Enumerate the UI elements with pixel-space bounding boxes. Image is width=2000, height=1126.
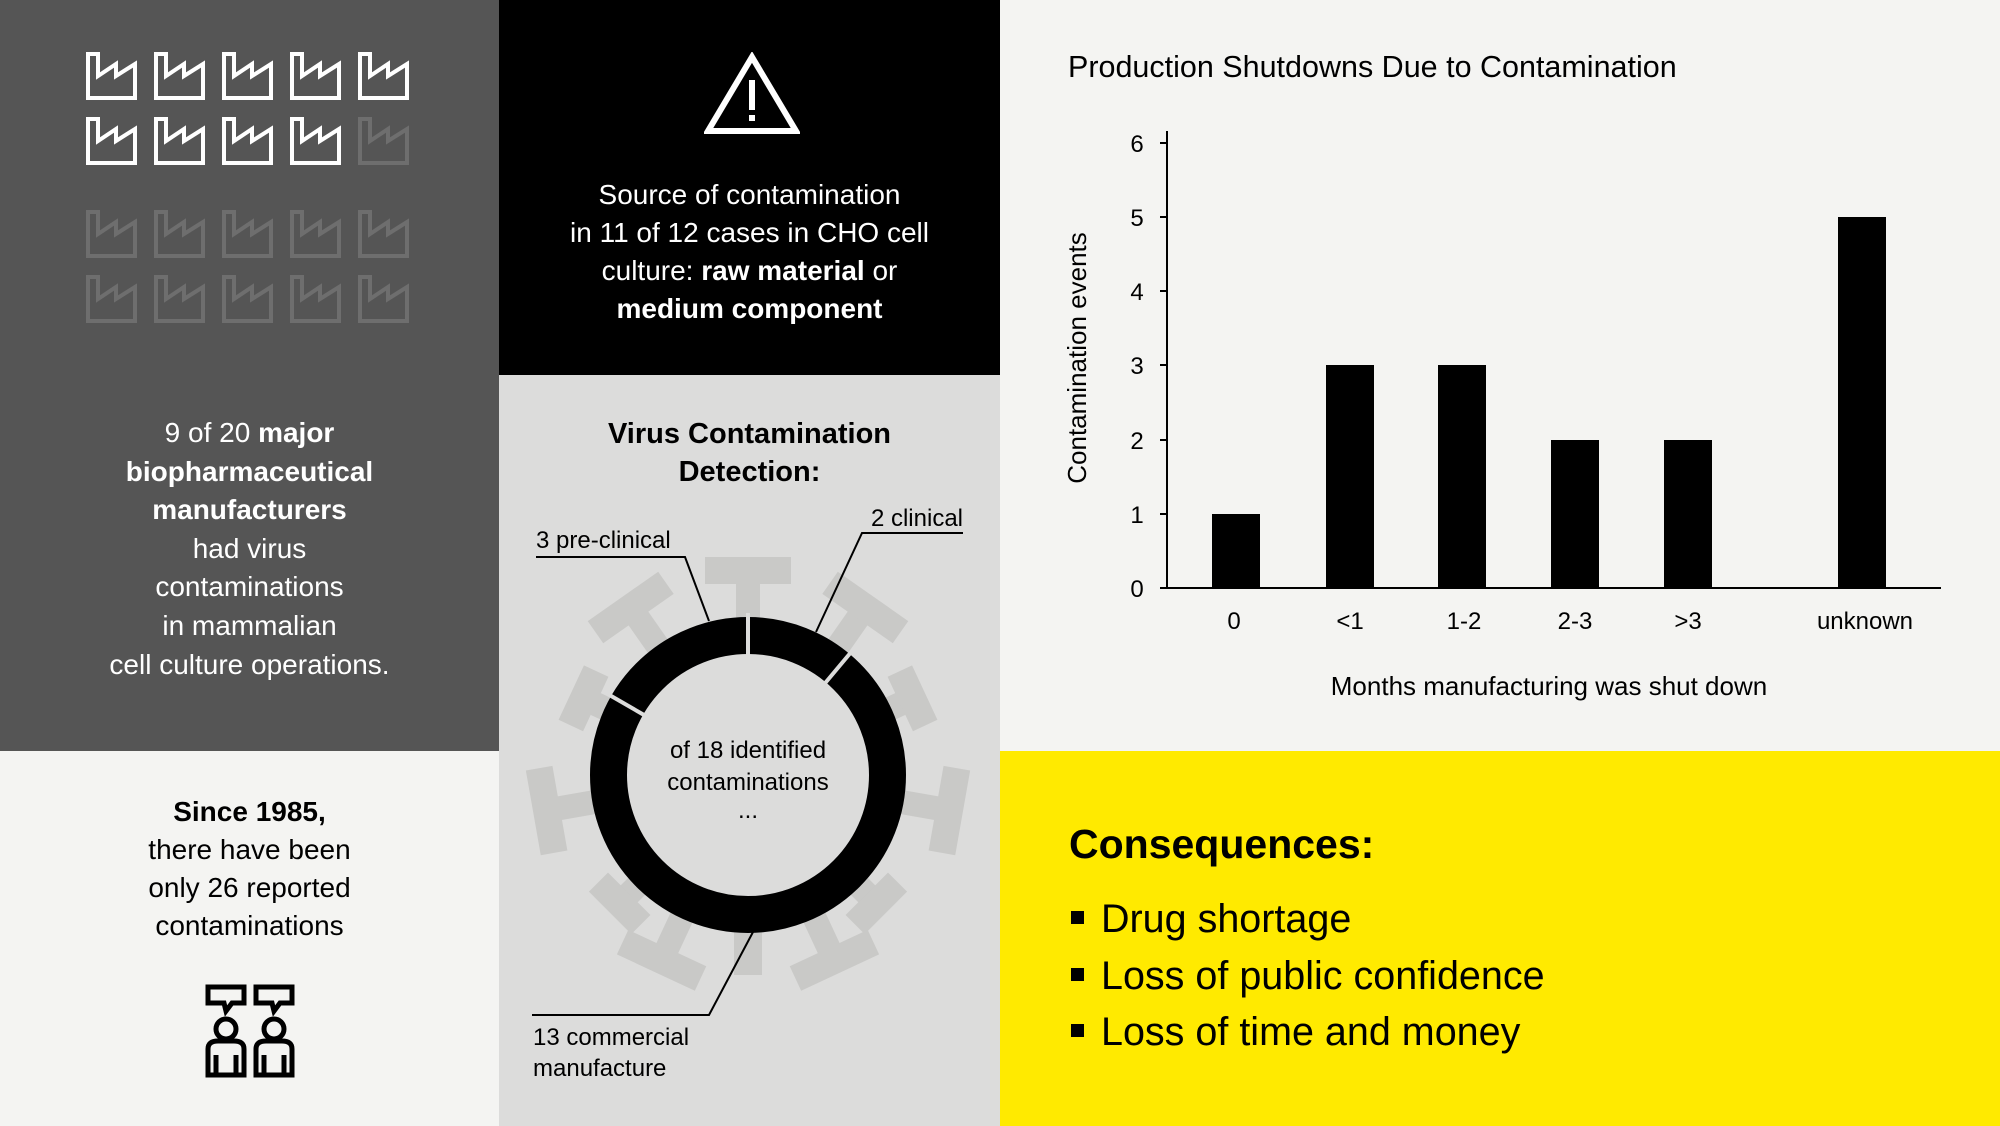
text: 9 of 20 manufacturers: cell culture operations. — [109, 649, 390, 680]
chart: donut with virus spikes: 2 clinical — [871, 505, 963, 532]
bar chart: 6 — [1130, 131, 1144, 158]
text: reported contaminations: contaminations — [155, 910, 344, 941]
chart: donut with virus spikes: ... — [738, 797, 758, 824]
bullet list: Loss of public confidence — [1101, 954, 1545, 998]
bar chart: 5 — [1130, 205, 1144, 232]
panel: source of contamination (black) — [499, 0, 1000, 375]
chart title: Production Shutdowns Due to Contamination — [1068, 50, 1677, 84]
chart: donut with virus spikes — [526, 505, 970, 1082]
chart: donut with virus spikes: manufacture — [533, 1055, 666, 1082]
heading: Virus Contamination Detection: Detection: — [679, 456, 820, 488]
bar chart: 0 — [1130, 576, 1144, 603]
heading: Virus Contamination Detection — [608, 418, 891, 488]
bullet list — [1071, 897, 1545, 1054]
chart: donut with virus spikes: of 18 identified — [670, 737, 826, 764]
text: reported contaminations: only 26 reported — [148, 872, 351, 903]
text: 9 of 20 manufacturers: manufacturers — [152, 494, 347, 525]
text: 9 of 20 manufacturers: in mammalian — [162, 610, 337, 641]
bullet list: Loss of time and money — [1101, 1010, 1520, 1054]
text: 9 of 20 manufacturers: 9 of 20 major — [165, 417, 334, 448]
text: source description: in 11 of 12 cases in CHO cell — [570, 217, 929, 248]
panel: since 1985 — [0, 751, 499, 1126]
chart: donut with virus spikes: 13 commercial — [533, 1024, 689, 1051]
text: reported contaminations — [148, 796, 351, 941]
bar chart: 0 — [1227, 608, 1241, 635]
panel: consequences (yellow) — [1000, 751, 2000, 1126]
bar chart: 1 — [1130, 502, 1144, 529]
bar chart: 2-3 — [1558, 608, 1592, 635]
bar chart: Months manufacturing was shut down — [1331, 671, 1767, 701]
panel: virus detection — [499, 375, 1000, 1126]
panel: manufacturers (dark grey) — [0, 0, 499, 751]
bar chart: 4 — [1130, 279, 1144, 306]
bar chart: 1-2 — [1447, 608, 1481, 635]
icon: warning triangle — [704, 52, 800, 134]
icon grid: factories — [86, 52, 409, 323]
text: reported contaminations: Since 1985, — [173, 796, 326, 827]
text: 9 of 20 manufacturers: had virus — [193, 533, 306, 564]
bar chart: >3 — [1674, 608, 1702, 635]
bar chart: Contamination events — [1062, 232, 1092, 484]
bar chart — [1062, 131, 1941, 701]
text: source description: Source of contamination — [599, 179, 900, 210]
chart: donut with virus spikes: 3 pre-clinical — [536, 527, 671, 554]
bar chart: unknown — [1817, 608, 1913, 635]
bar chart: 2 — [1130, 428, 1144, 455]
heading: Consequences: Consequences: — [1069, 821, 1374, 867]
heading: Virus Contamination Detection: Virus Contamination — [608, 418, 891, 450]
icon: two people with speech bubbles — [206, 984, 294, 1078]
chart: donut with virus spikes: contaminations — [667, 769, 829, 796]
text: source description: culture: raw material or — [602, 255, 897, 286]
bar chart: <1 — [1336, 608, 1364, 635]
panel: bar chart — [1000, 0, 2000, 751]
text: reported contaminations: there have been — [148, 834, 351, 865]
text: source description — [570, 179, 929, 324]
text: 9 of 20 manufacturers: biopharmaceutical — [126, 456, 373, 487]
text: 9 of 20 manufacturers — [109, 417, 390, 680]
text: source description: medium component — [616, 293, 882, 324]
text: 9 of 20 manufacturers: contaminations — [155, 571, 344, 602]
bullet list: Drug shortage — [1101, 897, 1351, 941]
bar chart: 3 — [1130, 353, 1144, 380]
